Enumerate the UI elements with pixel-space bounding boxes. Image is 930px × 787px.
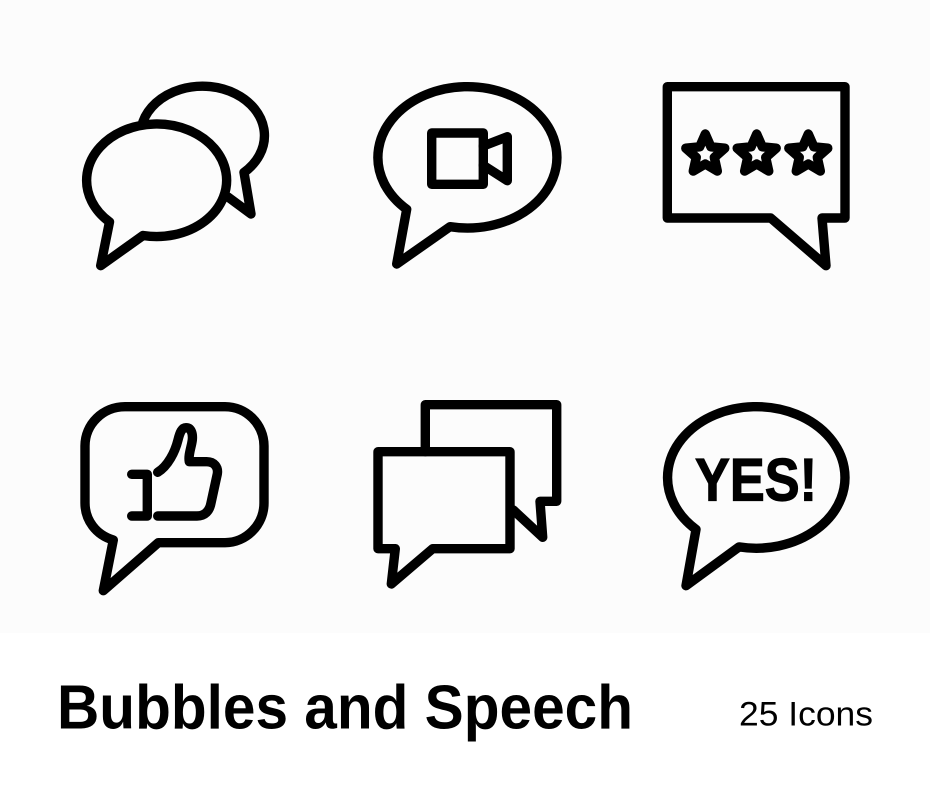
icon: YES speech bubble xyxy=(668,407,845,586)
icon: two oval speech bubbles xyxy=(87,86,264,266)
icon text: YES!: YES! xyxy=(695,447,817,514)
icon count label: 25 Icons xyxy=(739,696,873,734)
icon: video camera speech bubble xyxy=(378,87,557,264)
icon: overlapping square speech bubbles xyxy=(378,405,557,584)
icon: thumbs up speech bubble xyxy=(85,407,264,591)
icon: three star rating speech bubble xyxy=(667,87,845,266)
title: Bubbles and Speech xyxy=(57,673,633,742)
